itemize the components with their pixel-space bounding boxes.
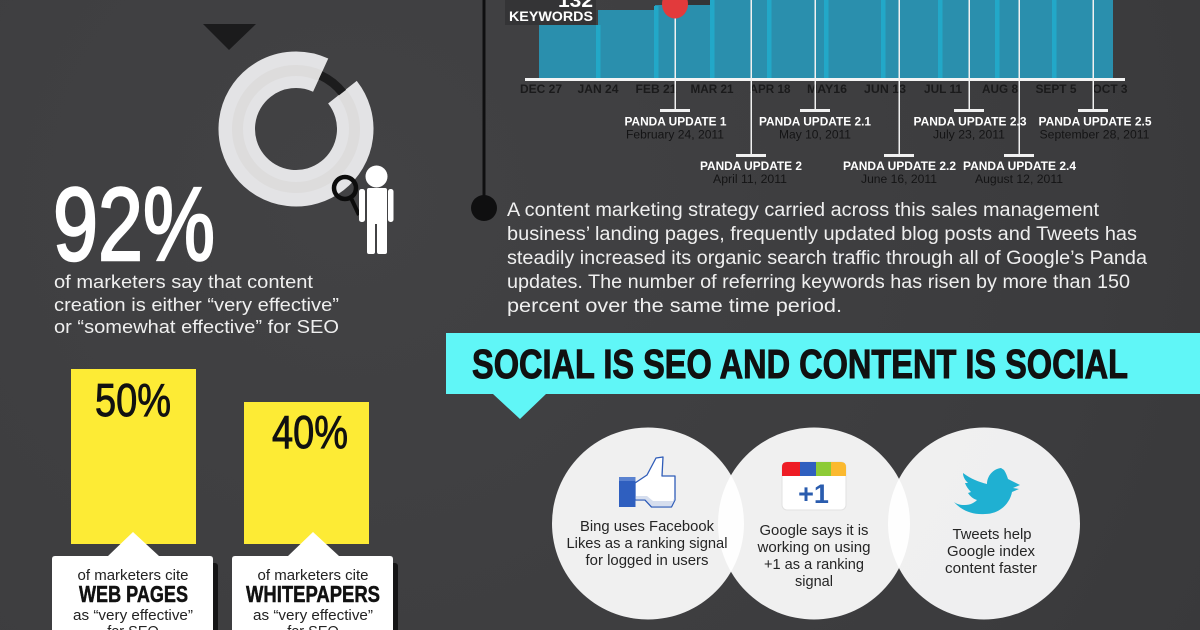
chart x-axis labels: SEPT 5 [1036,82,1077,96]
panda update markers: PANDA UPDATE 2.2 [843,159,956,173]
callout: whitepapers: as “very effective” [253,608,373,624]
panda update markers: February 24, 2011 [626,130,724,142]
bar: 40% whitepapers [244,402,369,544]
panda update markers: PANDA UPDATE 1 [624,114,727,128]
panda update markers: PANDA UPDATE 2.1 [759,114,871,128]
chart x-axis labels: DEC 27 [520,82,562,96]
big stat: 92%: 92% [53,167,215,283]
icon: google plus one: +1 [798,479,829,509]
text block: 92 percent description [54,271,339,337]
panda update markers: September 28, 2011 [1040,130,1150,142]
text block: 92 percent description: or “somewhat effective” for SEO [54,316,339,337]
icon: twitter bird [954,468,1020,514]
keyword count label: KEYWORDS [509,8,593,24]
text: bing facebook likes [566,519,728,569]
heading banner: social is seo [446,333,1200,419]
callout: web pages: of marketers cite [78,568,188,584]
venn circles: social signals [552,428,1080,620]
callout: web pages [52,532,218,630]
panda update markers: PANDA UPDATE 2.3 [914,114,1027,128]
chart x-axis labels [520,82,1128,96]
panda update markers: June 16, 2011 [861,174,937,186]
text block: content marketing strategy: steadily increased its organic search traffic through all of Google’s Panda [507,248,1147,269]
chart x-axis labels: JUN 13 [864,82,906,96]
chart x-axis labels: JUL 11 [924,82,962,96]
panda update markers: May 10, 2011 [779,130,851,142]
bar: 40% whitepapers: 40% [272,406,348,458]
callout: whitepapers: of marketers cite [258,568,368,584]
icon: google plus one [782,462,846,510]
text: tweets index: content faster [945,561,1037,577]
text: google plus one signal: working on using [756,540,870,556]
panda update markers: August 12, 2011 [975,174,1063,186]
text block: content marketing strategy: percent over the same time period. [507,296,842,317]
text: google plus one signal: +1 as a ranking [764,557,864,573]
chart x-axis labels: APR 18 [750,82,791,96]
timeline line and dot [471,0,497,221]
chart x-axis labels: MAY16 [807,82,847,96]
callout: whitepapers: WHITEPAPERS [246,581,380,607]
text: bing facebook likes: Likes as a ranking signal [566,536,728,552]
text: bing facebook likes: Bing uses Facebook [580,519,715,535]
text: google plus one signal [756,523,870,590]
panda update markers: PANDA UPDATE 2.5 [1038,114,1152,128]
chart x-axis labels: MAR 21 [690,82,734,96]
callout: web pages: as “very effective” [73,608,193,624]
bar chart: referring keywords [505,0,1125,81]
panda update markers: April 11, 2011 [713,174,787,186]
keyword count label [509,0,593,24]
chart x-axis labels: JAN 24 [578,82,619,96]
icon: facebook thumbs up [619,457,675,507]
panda update markers [624,0,1152,186]
text: tweets index [945,527,1037,577]
bar: 50% web pages [71,369,196,544]
text: tweets index: Google index [947,544,1036,560]
icon: red marker dot [662,0,688,18]
chart x-axis labels: AUG 8 [982,82,1018,96]
icon: dark triangle marker [203,24,256,50]
text block: content marketing strategy: A content marketing strategy carried across this sales management [507,200,1100,221]
panda update markers: PANDA UPDATE 2 [700,159,802,173]
chart x-axis labels: FEB 21 [636,82,677,96]
bar: 50% web pages: 50% [95,374,171,426]
text: google plus one signal: signal [795,574,833,590]
text block: 92 percent description: creation is either “very effective” [54,294,339,315]
donut chart: 92 percent [213,46,379,212]
panda update markers: PANDA UPDATE 2.4 [963,159,1076,173]
text: bing facebook likes: for logged in users [586,553,708,569]
callout: whitepapers [232,532,398,630]
icon: person with magnifying glass [334,166,394,254]
text block: content marketing strategy [507,200,1147,317]
text: tweets index: Tweets help [952,527,1032,543]
callout: web pages: WEB PAGES [79,581,188,607]
chart x-axis labels: OCT 3 [1092,82,1128,96]
text block: 92 percent description: of marketers say that content [54,271,313,292]
text block: content marketing strategy: updates. The number of referring keywords has risen by more than 150 [507,272,1130,293]
text: google plus one signal: Google says it is [760,523,868,539]
text block: content marketing strategy: business’ landing pages, frequently updated blog posts and Tweets has [507,224,1137,245]
panda update markers: July 23, 2011 [933,130,1005,142]
